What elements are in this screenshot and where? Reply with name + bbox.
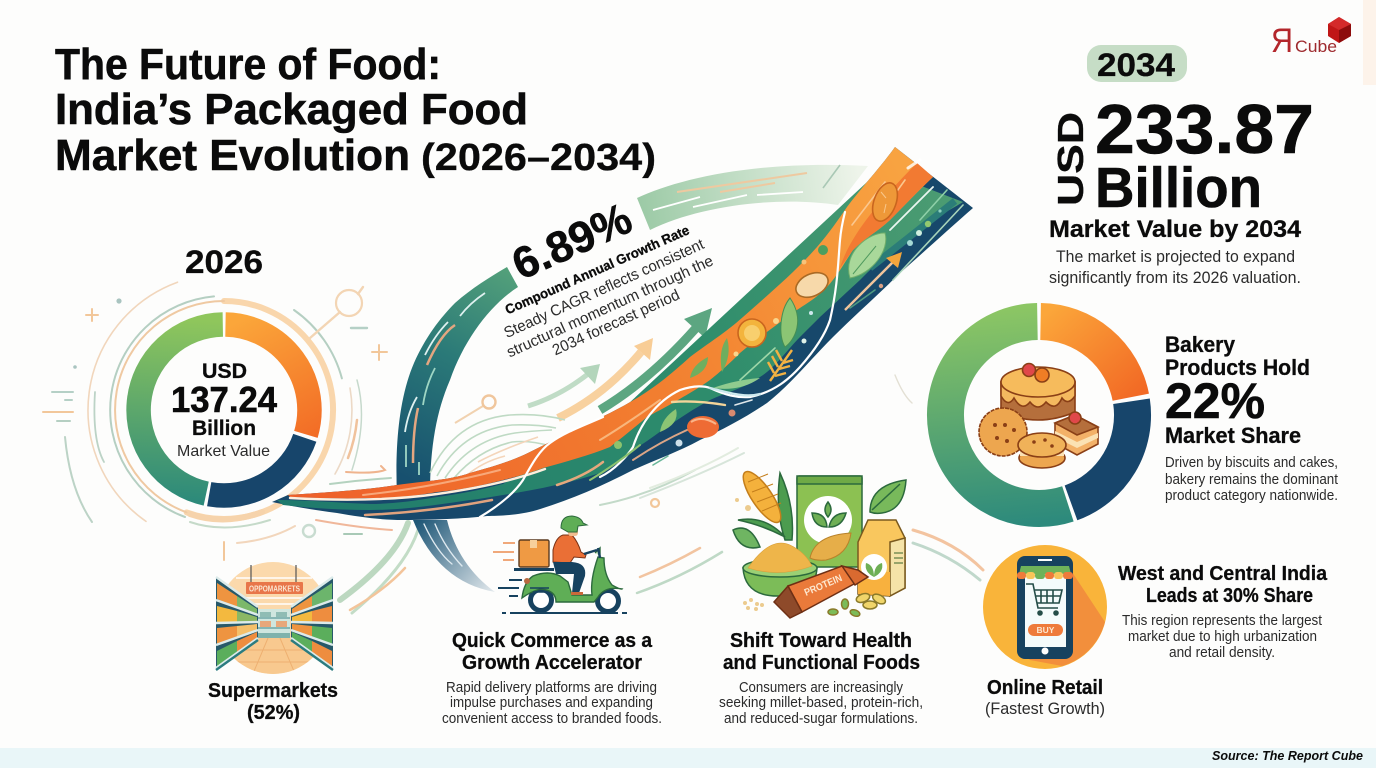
- bakery text: Bakery: [1165, 332, 1236, 357]
- supermarkets label: (52%): [247, 701, 300, 724]
- west and central india text: market due to high urbanization: [1128, 629, 1317, 645]
- donut centre text: USD: [202, 360, 247, 383]
- icon: bakery: [979, 364, 1098, 468]
- ribbon band: dark teal edge: [870, 201, 955, 268]
- bakery text: 22%: [1165, 373, 1265, 429]
- title: The Future of Food:: [55, 40, 441, 89]
- title: Market Evolution: [55, 131, 410, 180]
- 2034 market value: Billion: [1095, 156, 1262, 220]
- donut: bakery share: [945, 322, 1133, 508]
- year badge: 2034: [1087, 45, 1187, 83]
- west and central india text: [1118, 563, 1328, 661]
- bakery text: Market Share: [1165, 423, 1301, 448]
- CAGR callout: Steady CAGR reflects consistent: [501, 236, 707, 342]
- right shelf: [291, 577, 333, 670]
- sandwich cookie: [1018, 433, 1066, 468]
- bakery text: Products Hold: [1165, 355, 1310, 380]
- title: India’s Packaged Food: [55, 85, 528, 134]
- donut centre text: Market Value: [177, 443, 270, 460]
- CAGR callout: 2034 forecast period: [550, 287, 682, 359]
- west and central india text: and retail density.: [1169, 645, 1275, 661]
- small grains: [735, 498, 764, 611]
- pumpkin seeds: [828, 592, 887, 618]
- arrow: green: [600, 308, 712, 410]
- source note: Source: The Report Cube: [1212, 749, 1363, 763]
- scooter body: [522, 548, 622, 602]
- quick commerce text: impulse purchases and expanding: [450, 695, 653, 711]
- health pack: [797, 476, 862, 567]
- rear wheel: [530, 590, 552, 610]
- quick commerce text: [442, 630, 662, 727]
- year badge: 2034: 2034: [1097, 47, 1175, 83]
- west and central india text: West and Central India: [1118, 563, 1328, 585]
- cookie: [979, 408, 1027, 456]
- CAGR callout: 6.89%: [505, 194, 639, 290]
- food: wheat: [768, 350, 793, 381]
- donut centre text: [171, 360, 277, 460]
- front wheel: [598, 590, 618, 612]
- leaf: [870, 480, 906, 513]
- cart: [1026, 584, 1062, 615]
- supermarkets label: [208, 679, 338, 724]
- logo: RCube: Cube: [1295, 37, 1337, 56]
- food: tomato: [687, 416, 719, 438]
- ribbon undertrails: [340, 375, 983, 613]
- quick commerce text: Rapid delivery platforms are driving: [446, 680, 657, 696]
- back wall: [258, 609, 290, 638]
- ribbon band: green: [277, 170, 963, 510]
- growth ribbon: [272, 147, 973, 520]
- health foods text: and Functional Foods: [723, 652, 920, 674]
- buy button: BUY: [1037, 625, 1055, 635]
- donut: 2026 market value: [139, 324, 309, 495]
- health foods text: [719, 630, 923, 727]
- quick commerce text: Growth Accelerator: [462, 652, 642, 674]
- 2034 market value: Market Value by 2034: [1049, 216, 1301, 243]
- protein bar: PROTEIN: [803, 573, 844, 599]
- footer band: [0, 748, 1376, 768]
- cake slice: [1055, 412, 1098, 455]
- quick commerce text: convenient access to branded foods.: [442, 711, 662, 727]
- food: leaf: [660, 409, 677, 432]
- icon: delivery scooter: [493, 516, 627, 613]
- title: [55, 40, 656, 180]
- leaf: [733, 528, 760, 548]
- west and central india text: This region represents the largest: [1122, 613, 1322, 629]
- store sign: OPPOMARKETS: [249, 584, 300, 594]
- health foods text: Shift Toward Health: [730, 630, 912, 652]
- title: (2026–2034): [421, 137, 656, 179]
- arrow: peach: [558, 338, 653, 418]
- donut centre text: 137.24: [171, 379, 277, 420]
- protein bar: [774, 566, 868, 618]
- CAGR callout: [501, 194, 716, 361]
- arrow: in ribbon: [845, 252, 902, 310]
- cake: [1001, 364, 1075, 420]
- logo: RCube: [1271, 17, 1351, 60]
- decorative rings: 2026 donut: [43, 282, 392, 560]
- bakery text: product category nationwide.: [1165, 488, 1338, 504]
- CAGR callout: Compound Annual Growth Rate: [503, 222, 692, 317]
- ribbon band: deep orange: [840, 163, 933, 268]
- food: streak leaf: [713, 378, 760, 389]
- donut centre text: Billion: [192, 417, 256, 440]
- food: small leaves: [690, 338, 729, 378]
- icon: online retail phone: [983, 545, 1107, 669]
- milk carton: [858, 520, 905, 596]
- 2034 market value: The market is projected to expand: [1056, 247, 1295, 266]
- grain bowl: [743, 543, 817, 596]
- bakery text: [1165, 332, 1338, 504]
- west and central india text: Leads at 30% Share: [1146, 585, 1313, 607]
- back arc: [396, 165, 868, 495]
- food: leaf sprig: [781, 298, 798, 347]
- health foods text: and reduced-sugar formulations.: [724, 711, 918, 727]
- floor: [234, 638, 313, 674]
- handlebar: [584, 548, 600, 558]
- icon: health foods: [733, 467, 906, 618]
- food: dots: [614, 209, 942, 449]
- corner tint: [1363, 0, 1376, 85]
- CAGR callout: structural momentum through the: [504, 253, 716, 361]
- ribbon highlight lines: [290, 160, 963, 517]
- 2034 market value: significantly from its 2026 valuation.: [1049, 268, 1301, 287]
- 2034 market value: 233.87: [1095, 90, 1314, 168]
- health foods text: Consumers are increasingly: [739, 680, 904, 696]
- swirl lines behind ribbon: [430, 396, 565, 478]
- food: citrus: [738, 319, 766, 347]
- food: nut: [792, 268, 832, 302]
- online retail label: (Fastest Growth): [985, 699, 1105, 718]
- bakery text: Driven by biscuits and cakes,: [1165, 455, 1338, 471]
- rising arrows: [528, 308, 712, 418]
- 2034 market value: USD: [1050, 112, 1091, 206]
- rider: [553, 516, 587, 595]
- logo: RCube: Я: [1271, 22, 1293, 60]
- awning: [1017, 566, 1073, 579]
- ribbon band: navy: [272, 147, 973, 520]
- food: green leaf: [849, 233, 886, 278]
- online retail label: [985, 677, 1105, 718]
- 2034 market value: [1049, 90, 1314, 287]
- left shelf: [216, 577, 258, 670]
- year label: 2026: 2026: [185, 244, 263, 280]
- health foods text: seeking millet-based, protein-rich,: [719, 695, 923, 711]
- food: almond: [868, 179, 902, 225]
- arrow: light green: [528, 364, 600, 406]
- quick commerce text: Quick Commerce as a: [452, 630, 653, 652]
- corn: [737, 467, 792, 540]
- bakery text: bakery remains the dominant: [1165, 472, 1338, 488]
- online retail label: Online Retail: [987, 677, 1103, 699]
- icon: supermarket aisle: [215, 562, 334, 674]
- parcel: [514, 540, 554, 571]
- supermarkets label: Supermarkets: [208, 679, 338, 702]
- ribbon band: orange: [288, 147, 933, 498]
